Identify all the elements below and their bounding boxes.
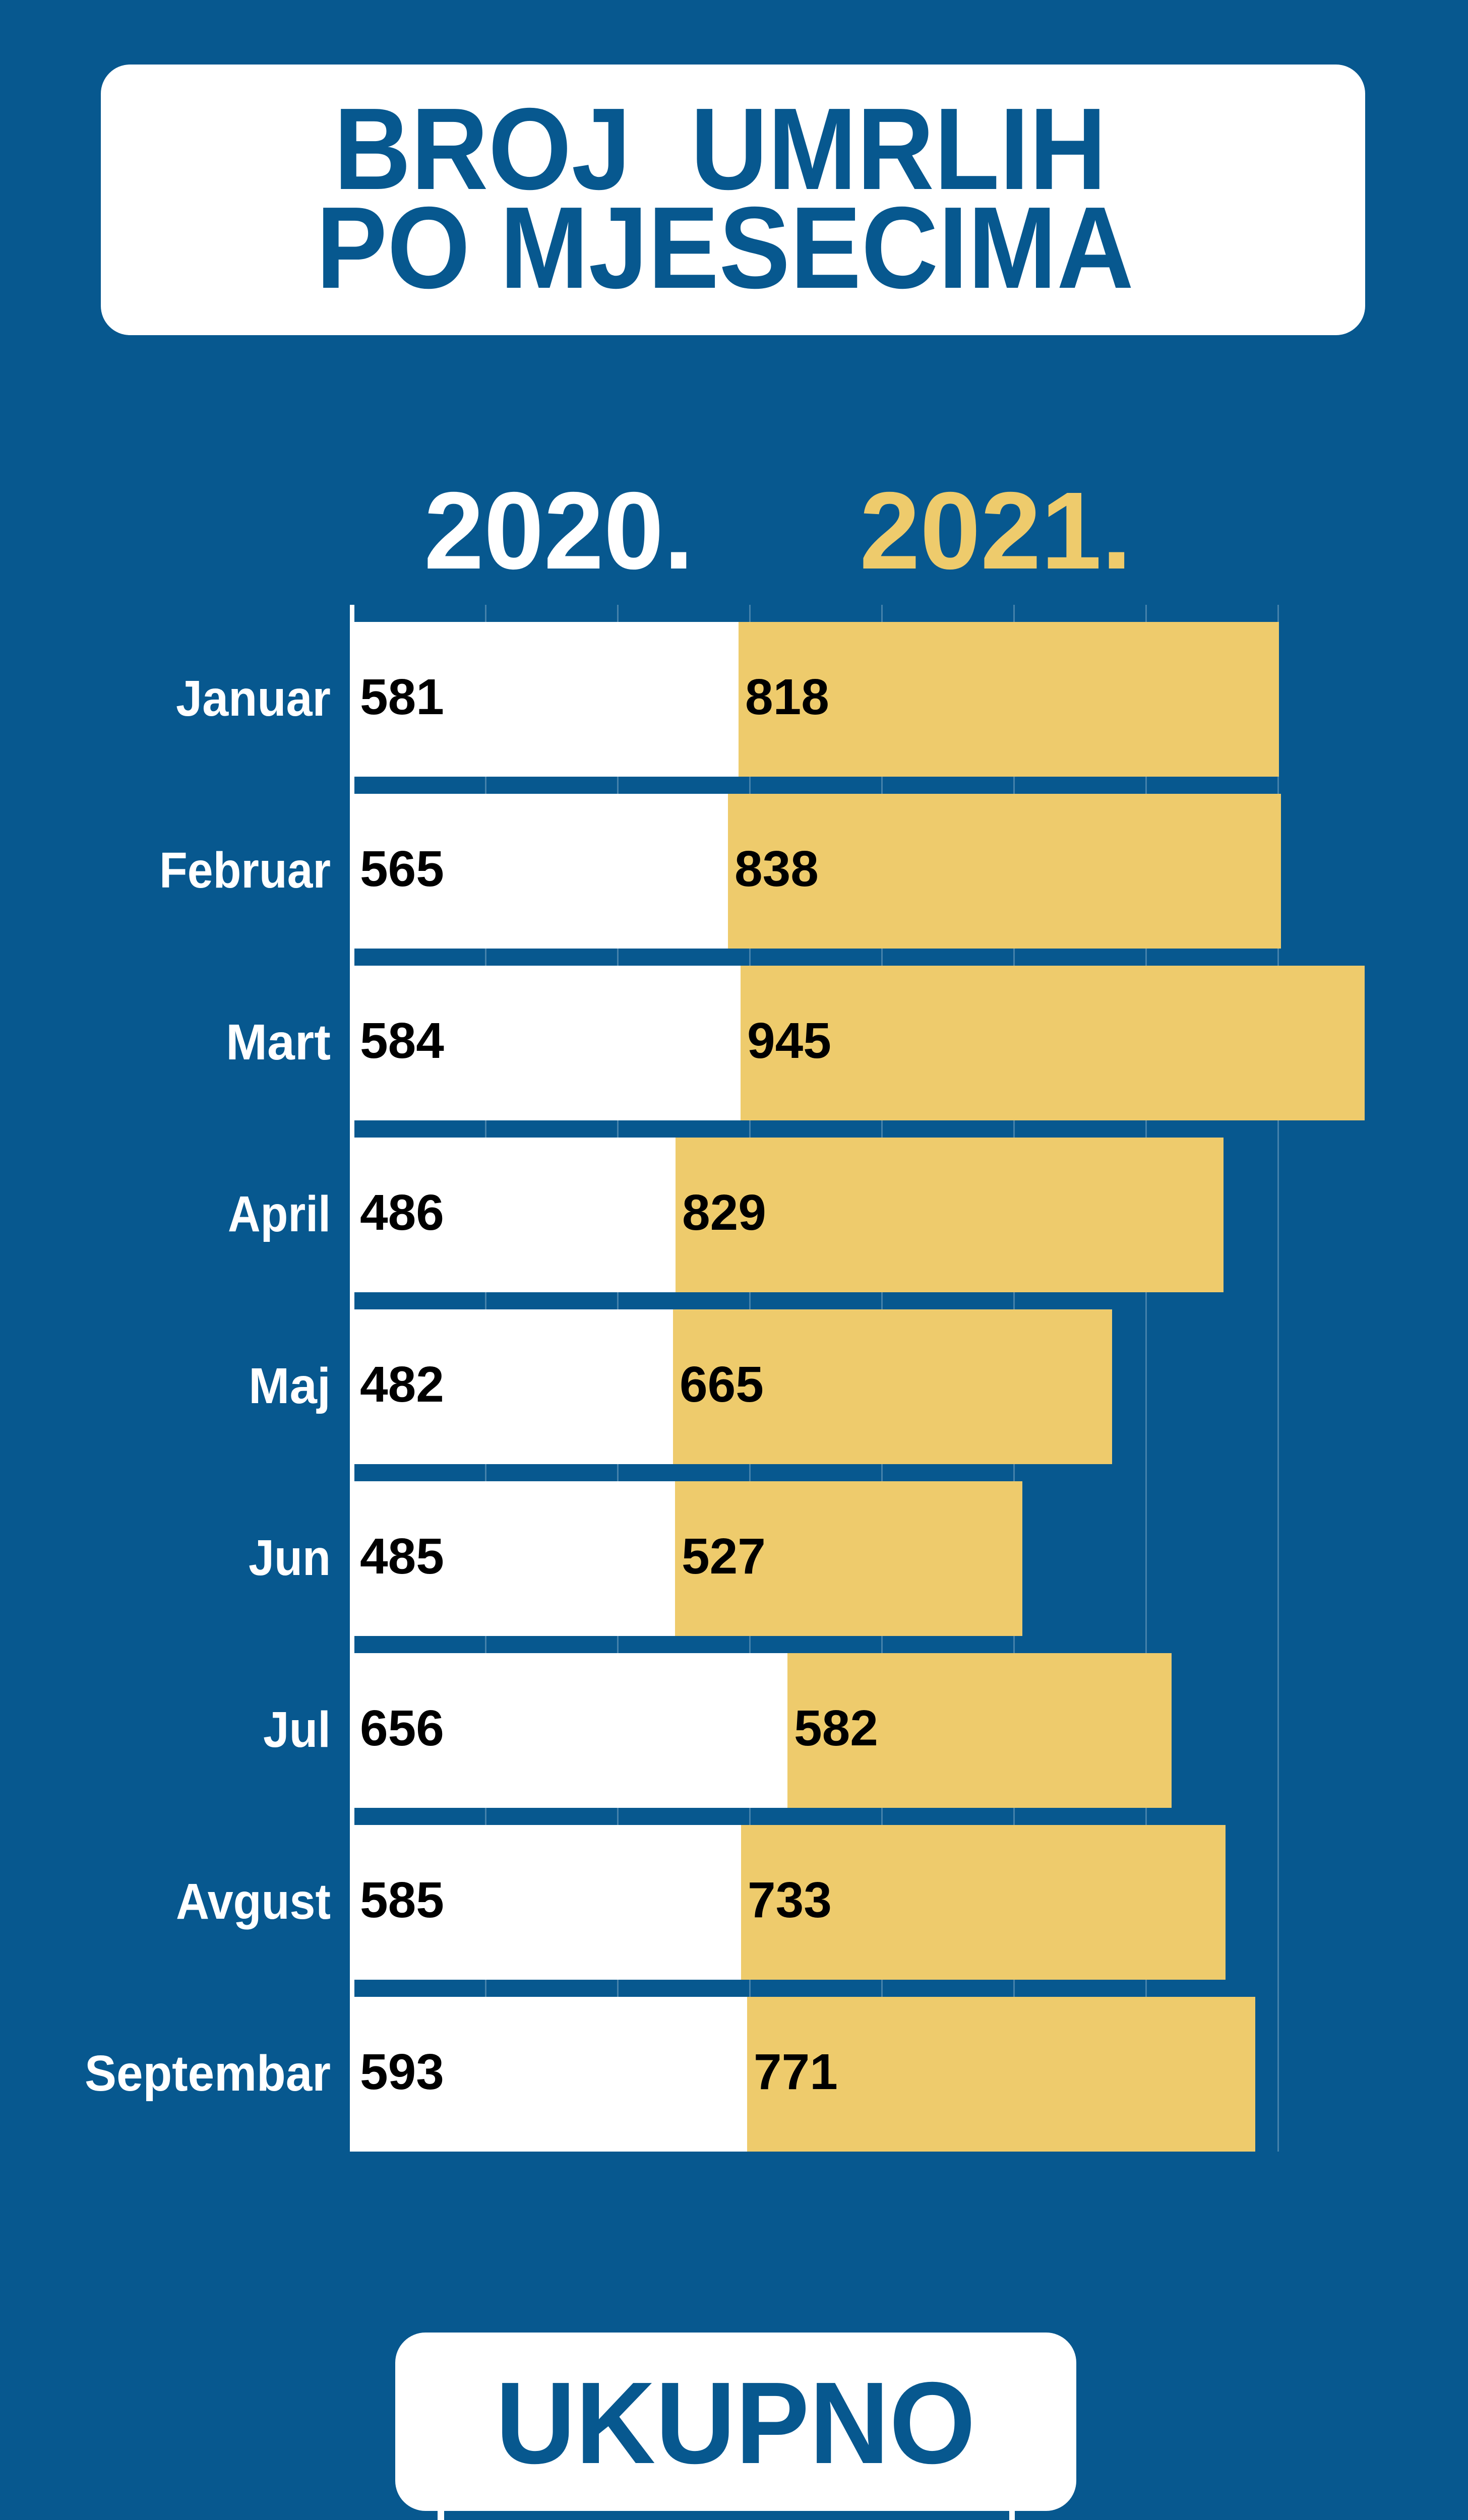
title heading: BROJ UMRLIH <box>334 84 1107 214</box>
row: Jun <box>249 1481 1022 1636</box>
row: Avgust: 733 <box>748 1872 832 1928</box>
row: Septembar: 771 <box>754 2044 838 2100</box>
row: Mart: 584 <box>360 1013 444 1069</box>
row: Februar <box>159 794 1281 949</box>
row: Februar: Februar <box>159 842 331 899</box>
arrow: to 2020 total <box>419 2511 464 2520</box>
row: Maj: 482 <box>360 1356 444 1413</box>
title heading: PO MJESECIMA <box>316 182 1134 312</box>
row: Jul <box>263 1653 1172 1808</box>
row: Jun: Jun <box>249 1530 331 1586</box>
row: Februar: 838 <box>735 841 819 897</box>
row: Jun: 485 <box>360 1528 444 1585</box>
row: Maj: Maj <box>249 1358 331 1414</box>
row: Septembar: 593 <box>360 2044 444 2100</box>
title heading <box>316 84 1134 312</box>
legend: year headings: 2020. <box>424 470 694 592</box>
panel: ukupno <box>395 2333 1076 2511</box>
legend: year headings <box>424 470 1132 592</box>
row: Februar: 565 <box>360 841 444 897</box>
row: Januar <box>176 622 1279 777</box>
row: Maj: 665 <box>680 1356 764 1413</box>
row: Maj <box>249 1309 1112 1464</box>
row: Mart <box>226 966 1365 1120</box>
row: Avgust <box>176 1825 1226 1980</box>
row: Jul: 656 <box>360 1700 444 1756</box>
row: Septembar <box>85 1997 1255 2152</box>
row: Jul: 582 <box>794 1700 878 1756</box>
row: Januar: 581 <box>360 669 444 725</box>
panel: title <box>101 65 1365 335</box>
row: Avgust: Avgust <box>176 1873 331 1930</box>
row: Septembar: Septembar <box>85 2045 331 2102</box>
row: April: April <box>228 1186 331 1242</box>
row: Mart: 945 <box>747 1013 831 1069</box>
row: Mart: Mart <box>226 1014 331 1070</box>
arrow: to 2021 total <box>990 2511 1034 2520</box>
legend: year headings: 2021. <box>860 470 1132 592</box>
bar chart: deaths by month <box>85 605 1365 2152</box>
row: Januar: 818 <box>745 669 829 725</box>
row: April: 829 <box>682 1184 766 1241</box>
ukupno heading: UKUPNO <box>496 2358 975 2488</box>
row: Jul: Jul <box>263 1702 331 1758</box>
row: April <box>228 1138 1224 1292</box>
row: April: 486 <box>360 1184 444 1241</box>
row: Avgust: 585 <box>360 1872 444 1928</box>
row: Jun: 527 <box>682 1528 766 1585</box>
row: Januar: Januar <box>176 670 331 727</box>
